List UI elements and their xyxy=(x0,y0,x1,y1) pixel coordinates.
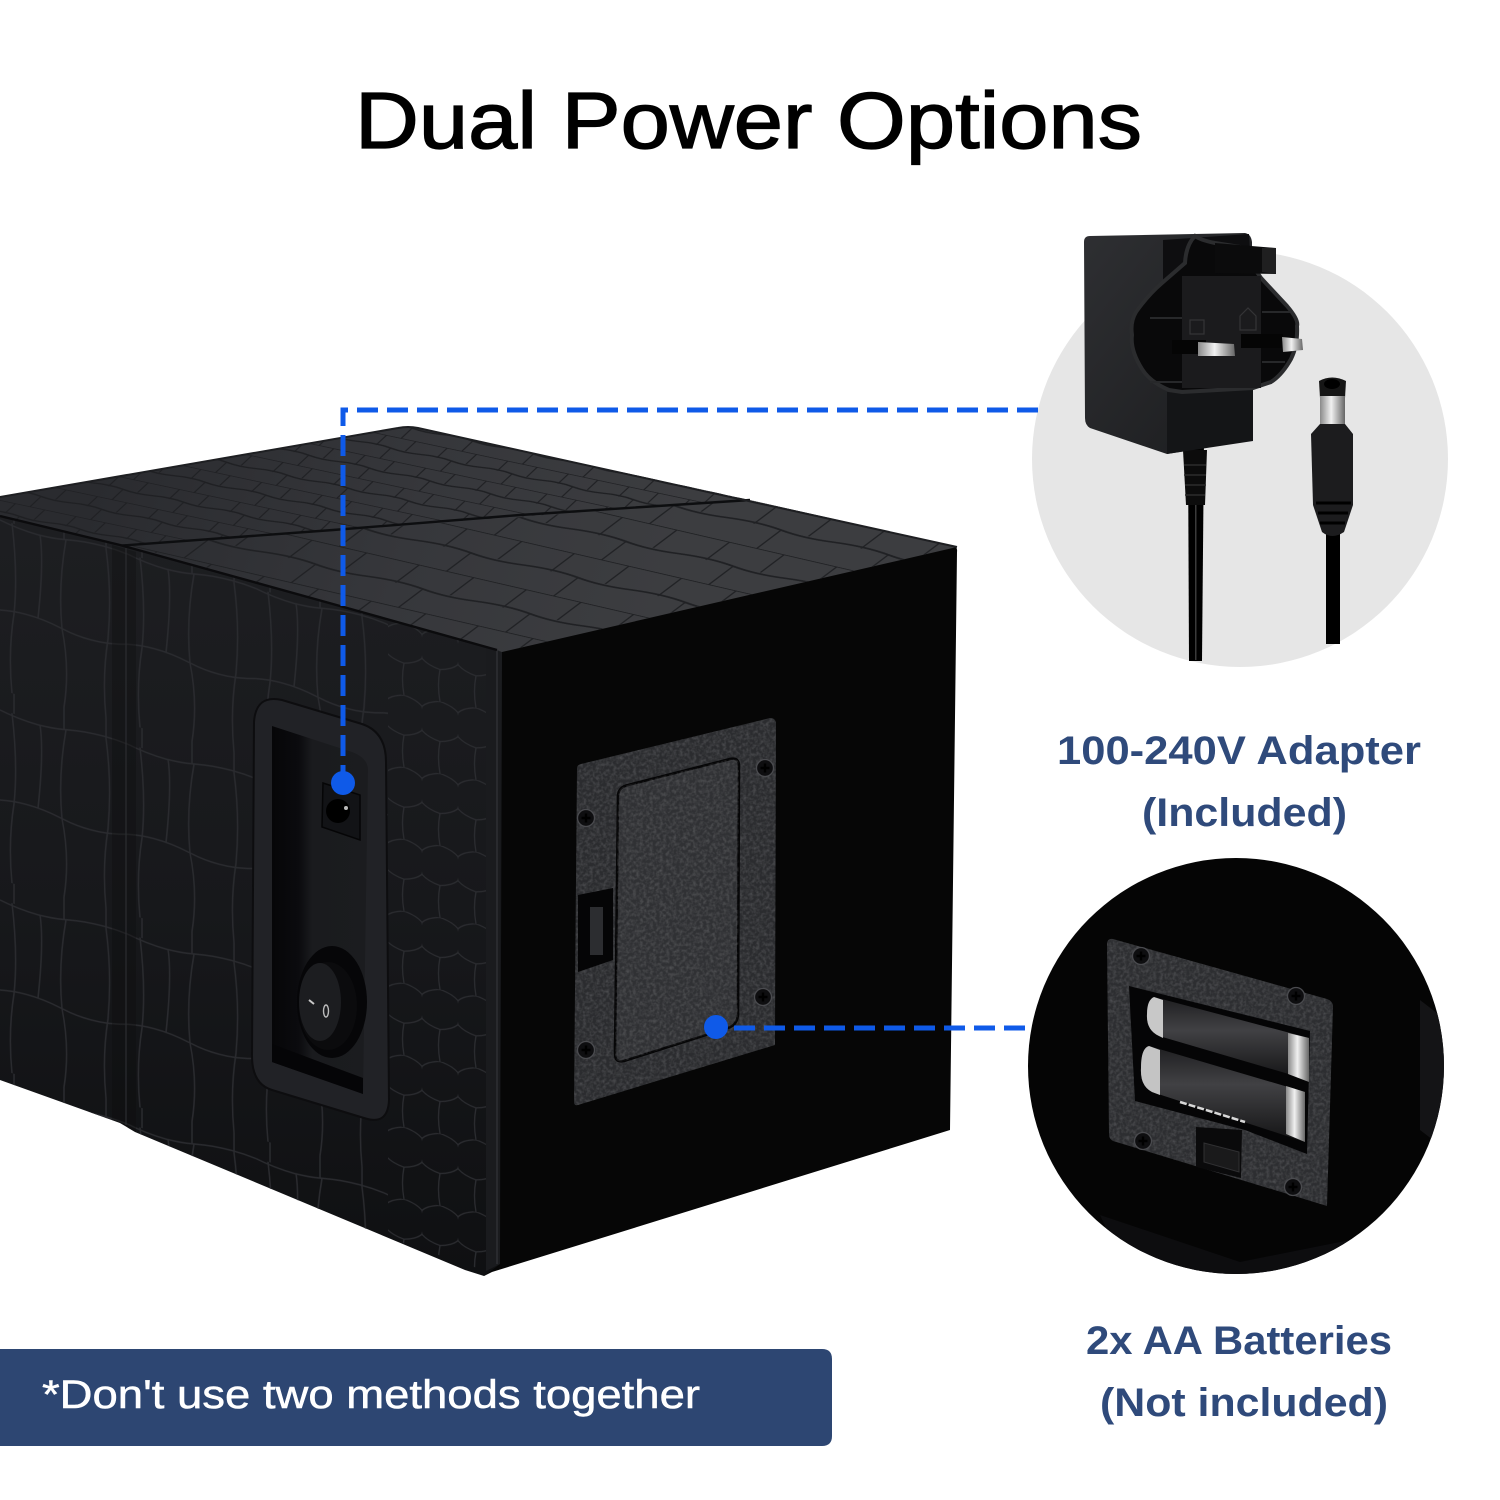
power jack xyxy=(322,783,360,840)
box right face xyxy=(484,546,957,1276)
warning banner: *Don't use two methods together xyxy=(42,1373,700,1417)
product: black winder box xyxy=(0,427,957,1276)
circle: adapter photo xyxy=(1032,233,1448,667)
connector: adapter to power jack xyxy=(331,410,1038,795)
icon: wall adapter xyxy=(1084,233,1303,661)
box top face xyxy=(0,427,957,652)
label: batteries: 2x AA Batteries xyxy=(1086,1319,1392,1363)
power panel with jack and switch xyxy=(252,699,389,1120)
label: adapter: (Included) xyxy=(1142,791,1347,835)
title: Dual Power Options xyxy=(355,76,1142,165)
label: adapter xyxy=(1057,729,1421,835)
circle: battery compartment photo xyxy=(1028,858,1446,1290)
box left face xyxy=(0,516,502,1276)
battery holder plate xyxy=(1107,939,1333,1206)
warning banner xyxy=(0,1349,832,1446)
icon: DC barrel plug xyxy=(1311,378,1353,644)
rocker switch xyxy=(297,946,367,1058)
battery compartment cover xyxy=(574,718,776,1105)
label: adapter: 100-240V Adapter xyxy=(1057,729,1421,773)
label: batteries: (Not included) xyxy=(1100,1381,1388,1425)
label: batteries xyxy=(1086,1319,1392,1425)
icon: two AA batteries xyxy=(1141,997,1309,1142)
connector: batteries to cover xyxy=(704,1015,1025,1039)
